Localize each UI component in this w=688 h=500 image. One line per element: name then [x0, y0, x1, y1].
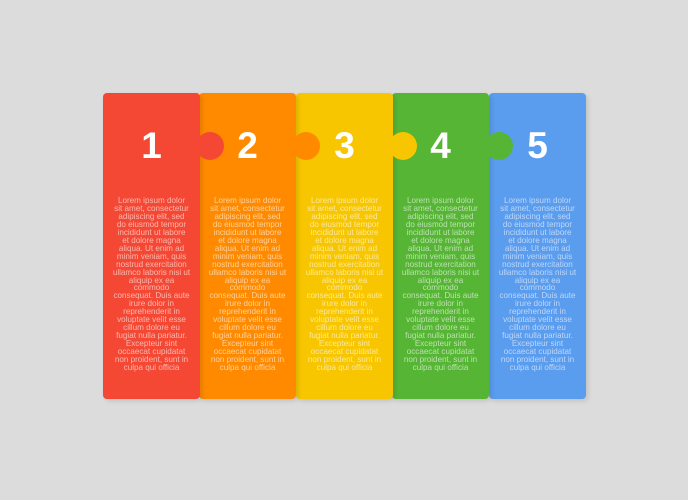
column 5	[499, 125, 576, 372]
column 2: adipiscing elit, sed	[214, 212, 281, 221]
column 3: aliquip ex ea	[322, 276, 367, 285]
tab 1	[196, 132, 224, 160]
column 4: occaecat cupidatat	[407, 347, 474, 356]
column 4: commodo	[423, 283, 458, 292]
column 5: 5	[527, 125, 548, 166]
column 5: reprehenderit in	[509, 307, 566, 316]
column 4: cillum dolore eu	[412, 323, 469, 332]
column 5: et dolore magna	[508, 236, 567, 245]
column 2: consequat. Duis aute	[209, 291, 286, 300]
column 5: aliqua. Ut enim ad	[505, 244, 570, 253]
column 3: cillum dolore eu	[316, 323, 373, 332]
column 1: reprehenderit in	[123, 307, 180, 316]
column 5: incididunt ut labore	[504, 228, 571, 237]
column 1: cillum dolore eu	[123, 323, 180, 332]
panel 3	[296, 93, 393, 399]
column 4: Excepteur sint	[415, 339, 466, 348]
column 4: fugiat nulla pariatur.	[405, 331, 476, 340]
column 3: culpa qui officia	[317, 363, 372, 372]
column 4: aliquip ex ea	[418, 276, 463, 285]
column 1: sit amet, consectetur	[114, 204, 189, 213]
column 2: cillum dolore eu	[219, 323, 276, 332]
column 3: adipiscing elit, sed	[311, 212, 378, 221]
column 1: do eiusmod tempor	[117, 220, 186, 229]
column 4: ullamco laboris nisi ut	[402, 268, 479, 277]
column 5: aliquip ex ea	[515, 276, 560, 285]
column 1: non proident, sunt in	[115, 355, 188, 364]
column 4: incididunt ut labore	[407, 228, 474, 237]
column 4: do eiusmod tempor	[406, 220, 475, 229]
column 2: fugiat nulla pariatur.	[212, 331, 283, 340]
column 4: sit amet, consectetur	[403, 204, 478, 213]
column 1: Excepteur sint	[126, 339, 177, 348]
column 1: commodo	[134, 283, 169, 292]
column 2: sit amet, consectetur	[210, 204, 285, 213]
column 1: 1	[141, 125, 162, 166]
column 5: irure dolor in	[515, 299, 560, 308]
column 3: minim veniam, quis	[310, 252, 379, 261]
column 4: minim veniam, quis	[406, 252, 475, 261]
column 5: adipiscing elit, sed	[504, 212, 571, 221]
column 3: incididunt ut labore	[311, 228, 378, 237]
column 3: reprehenderit in	[316, 307, 373, 316]
panel 2	[199, 93, 296, 399]
column 5: voluptate velit esse	[503, 315, 572, 324]
column 2: reprehenderit in	[219, 307, 276, 316]
column 3	[306, 125, 384, 372]
column 2: minim veniam, quis	[213, 252, 282, 261]
column 5: occaecat cupidatat	[504, 347, 571, 356]
column 4: consequat. Duis aute	[402, 291, 479, 300]
column 3: ullamco laboris nisi ut	[306, 268, 383, 277]
column 3: sit amet, consectetur	[307, 204, 382, 213]
column 4: 4	[430, 125, 451, 166]
column 3: irure dolor in	[322, 299, 367, 308]
column 3: commodo	[327, 283, 362, 292]
column 2: Lorem ipsum dolor	[214, 196, 281, 205]
column 2: Excepteur sint	[222, 339, 273, 348]
column 5: do eiusmod tempor	[503, 220, 572, 229]
column 5: commodo	[520, 283, 555, 292]
column 2	[209, 125, 286, 372]
column 5: Lorem ipsum dolor	[504, 196, 571, 205]
column 1: incididunt ut labore	[118, 228, 185, 237]
column 4: Lorem ipsum dolor	[407, 196, 474, 205]
column 4: non proident, sunt in	[404, 355, 477, 364]
tab 3	[389, 132, 417, 160]
column 3: 3	[334, 125, 355, 166]
column 4: et dolore magna	[411, 236, 470, 245]
column 5: sit amet, consectetur	[500, 204, 575, 213]
column 4: voluptate velit esse	[406, 315, 475, 324]
column 3: fugiat nulla pariatur.	[309, 331, 380, 340]
column 5: Excepteur sint	[512, 339, 563, 348]
column 2: irure dolor in	[225, 299, 270, 308]
column 3: do eiusmod tempor	[310, 220, 379, 229]
column 2: voluptate velit esse	[213, 315, 282, 324]
column 4: irure dolor in	[418, 299, 463, 308]
column 3: nostrud exercitation	[309, 260, 380, 269]
column 5: consequat. Duis aute	[499, 291, 576, 300]
column 1: fugiat nulla pariatur.	[116, 331, 187, 340]
column 4: reprehenderit in	[412, 307, 469, 316]
column 3: voluptate velit esse	[310, 315, 379, 324]
column 1: minim veniam, quis	[117, 252, 186, 261]
tab 4	[485, 132, 513, 160]
column 3: aliqua. Ut enim ad	[312, 244, 377, 253]
column 1: aliqua. Ut enim ad	[119, 244, 184, 253]
column 1: occaecat cupidatat	[118, 347, 185, 356]
panel 4	[392, 93, 489, 399]
column 5: nostrud exercitation	[502, 260, 573, 269]
column 2: do eiusmod tempor	[213, 220, 282, 229]
column 1: irure dolor in	[129, 299, 174, 308]
column 2: incididunt ut labore	[214, 228, 281, 237]
column 2: nostrud exercitation	[212, 260, 283, 269]
column 1: voluptate velit esse	[117, 315, 186, 324]
column 1	[113, 125, 190, 372]
column 2: et dolore magna	[218, 236, 277, 245]
column 2: 2	[237, 125, 258, 166]
column 5: culpa qui officia	[510, 363, 565, 372]
column 2: aliqua. Ut enim ad	[215, 244, 280, 253]
column 4: culpa qui officia	[413, 363, 468, 372]
column 4	[402, 125, 480, 372]
column 5: cillum dolore eu	[509, 323, 566, 332]
column 3: occaecat cupidatat	[311, 347, 378, 356]
column 5: minim veniam, quis	[503, 252, 572, 261]
column 3: non proident, sunt in	[308, 355, 381, 364]
column 2: occaecat cupidatat	[214, 347, 281, 356]
column 1: Lorem ipsum dolor	[118, 196, 185, 205]
column 3: Lorem ipsum dolor	[311, 196, 378, 205]
column 4: aliqua. Ut enim ad	[408, 244, 473, 253]
column 1: culpa qui officia	[124, 363, 179, 372]
column 2: non proident, sunt in	[211, 355, 284, 364]
column 1: adipiscing elit, sed	[118, 212, 185, 221]
column 2: commodo	[230, 283, 265, 292]
column 1: consequat. Duis aute	[113, 291, 190, 300]
tab 2	[292, 132, 320, 160]
column 1: et dolore magna	[122, 236, 181, 245]
column 1: ullamco laboris nisi ut	[113, 268, 190, 277]
column 2: aliquip ex ea	[225, 276, 270, 285]
column 2: culpa qui officia	[220, 363, 275, 372]
column 3: et dolore magna	[315, 236, 374, 245]
column 5: ullamco laboris nisi ut	[499, 268, 576, 277]
column 1: nostrud exercitation	[116, 260, 187, 269]
column 3: Excepteur sint	[319, 339, 370, 348]
column 2: ullamco laboris nisi ut	[209, 268, 286, 277]
panel 1	[103, 93, 200, 399]
panel 5	[489, 93, 586, 399]
column 5: non proident, sunt in	[501, 355, 574, 364]
column 5: fugiat nulla pariatur.	[502, 331, 573, 340]
column 4: adipiscing elit, sed	[407, 212, 474, 221]
column 3: consequat. Duis aute	[306, 291, 383, 300]
column 1: aliquip ex ea	[129, 276, 174, 285]
column 4: nostrud exercitation	[405, 260, 476, 269]
